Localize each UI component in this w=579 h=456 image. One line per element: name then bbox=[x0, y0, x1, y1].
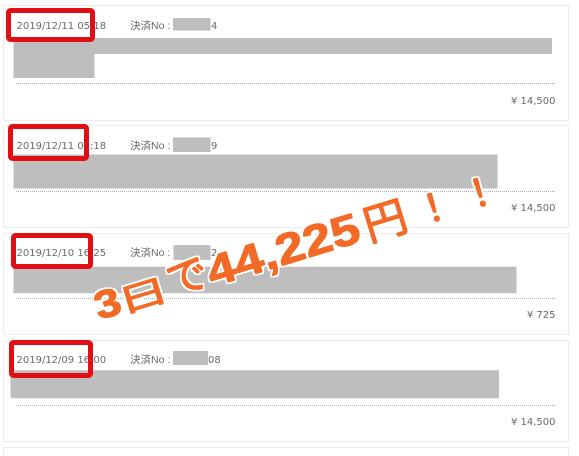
panel: payment record 1 bbox=[4, 6, 568, 120]
redacted description 1 bbox=[14, 38, 552, 78]
payment number 2: 9 bbox=[211, 141, 217, 152]
payment number 2: 決済No : bbox=[130, 140, 170, 152]
panel: payment record 4 bbox=[4, 340, 568, 442]
panel: payment record 3 bbox=[4, 234, 568, 334]
payment number 1: 4 bbox=[211, 21, 217, 32]
date 3: 2019/12/10 16:25 bbox=[16, 248, 106, 259]
payment number 1: 決済No : bbox=[130, 20, 170, 32]
red highlight box 1 bbox=[8, 10, 92, 40]
orange headline: 3日で44,225円！！: 44,225 bbox=[201, 204, 366, 297]
red highlight box 4 bbox=[12, 342, 90, 376]
orange headline: 3日で44,225円！！: 日 bbox=[114, 272, 173, 321]
payment number 1 bbox=[130, 18, 217, 32]
orange headline: 3日で44,225円！！: 3 bbox=[89, 279, 127, 329]
payment number 3: 2 bbox=[211, 248, 217, 259]
amount 4: ¥ 14,500 bbox=[511, 417, 556, 428]
date 1: 2019/12/11 05:18 bbox=[16, 21, 106, 32]
orange headline: 3日で44,225円！！: 円 bbox=[358, 193, 413, 251]
redacted description 4 bbox=[10, 370, 499, 398]
orange headline: 3日で44,225円！！: ！ bbox=[456, 169, 504, 220]
orange headline: 3日で44,225円！！: ！ bbox=[410, 184, 458, 235]
amount 3: ¥ 725 bbox=[527, 310, 556, 321]
payment number 3 bbox=[130, 245, 217, 260]
date 2: 2019/12/11 05:18 bbox=[16, 141, 106, 152]
amount 2: ¥ 14,500 bbox=[511, 203, 556, 214]
redacted description 2 bbox=[14, 154, 498, 188]
payment number 3: 決済No : bbox=[130, 247, 170, 259]
payment number 2 bbox=[130, 138, 217, 152]
payment number 4: 決済No : bbox=[130, 354, 170, 366]
payment number 4: 08 bbox=[208, 355, 221, 366]
panel: next record, cut off bbox=[4, 448, 568, 456]
red highlight box 3 bbox=[14, 236, 90, 266]
payment number 4 bbox=[130, 351, 221, 366]
panel: payment record 2 bbox=[4, 126, 568, 228]
date 4: 2019/12/09 16:00 bbox=[16, 355, 106, 366]
redacted description 3 bbox=[14, 267, 516, 293]
red highlight box 2 bbox=[10, 126, 86, 158]
amount 1: ¥ 14,500 bbox=[511, 96, 556, 107]
orange headline: 3日で44,225円！！: で bbox=[161, 249, 214, 305]
orange headline: 3日で44,225円！！ bbox=[89, 169, 504, 329]
